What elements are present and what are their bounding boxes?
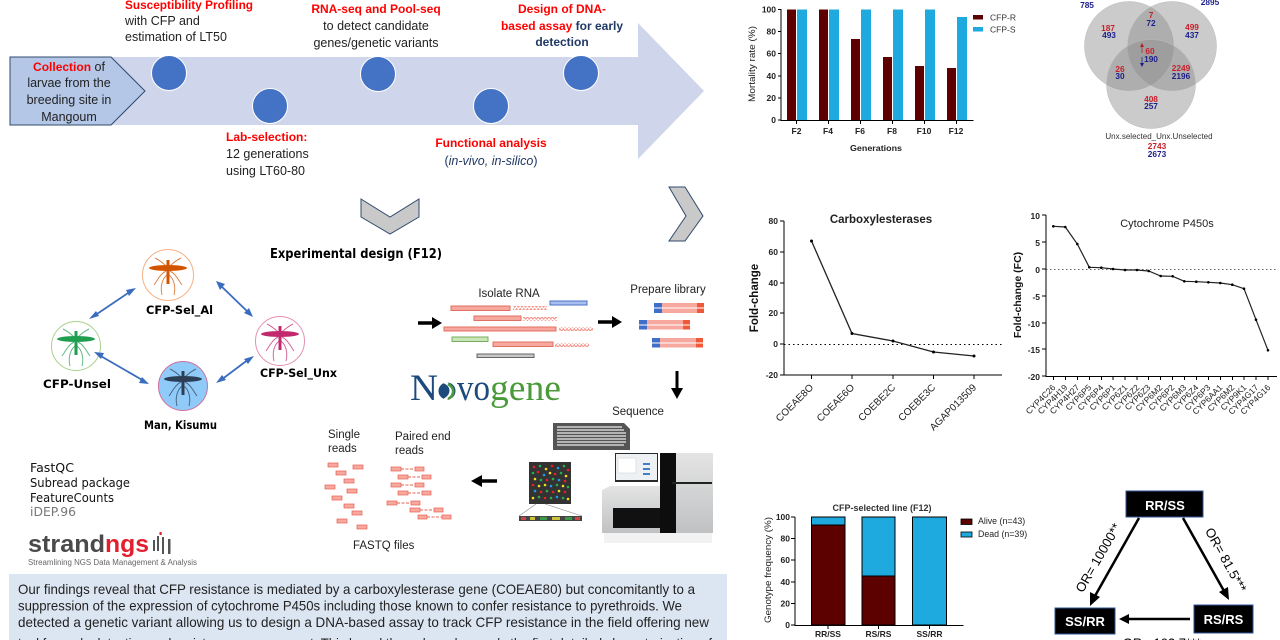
step: DNA-based assay: Design of DNA- [518,2,606,16]
chart: venn diagram: 72 [1146,18,1156,28]
chart: mortality rate bars: 0 [771,115,776,125]
logo: strandngs: ngs [105,531,149,558]
chart: cytochrome P450s line: CYP6Z1 [1100,382,1130,412]
chart: genotype frequency stacked bars: 60 [781,555,790,565]
step: susceptibility profiling [124,0,253,44]
chart: mortality rate bars: 100 [762,4,776,14]
experimental design network: CFP-Sel_Unx [260,366,338,381]
chart: venn diagram: 2249 [1172,63,1191,73]
arrows [1090,518,1229,624]
step: RNA-seq and Pool-seq: RNA-seq and Pool-seq [311,2,441,16]
icon: CFP-Unsel mosquito [52,322,100,370]
chart: cytochrome P450s line: CYP6P4 [1075,382,1106,412]
chart: cytochrome P450s line: 0 [1035,265,1040,275]
chart: venn diagram: 2196 [1172,71,1191,81]
chart: genotype frequency stacked bars: 80 [781,534,790,544]
chart: venn diagram: 493 [1102,30,1116,40]
chart: genotype frequency stacked bars: RS/RS [866,629,892,639]
chart: mortality rate bars: F2 [792,126,802,136]
chart: cytochrome P450s line: -5 [1032,292,1040,302]
chart: venn diagram: 190 [1144,54,1158,64]
genotype odds ratio triangle: OR= 10000** [1072,521,1124,595]
chart: venn diagram: 785 [1080,0,1094,10]
step: susceptibility profiling: with CFP and [124,14,200,28]
base-calling image [519,462,582,521]
software list: FastQC [30,460,74,475]
library constructs [639,303,704,348]
chart: cytochrome P450s line: CYP6M3 [1157,382,1189,413]
software list: iDEP.96 [30,504,76,519]
paired end reads: reads [395,445,424,457]
chart: genotype frequency stacked bars: 20 [781,598,790,608]
heading: experimental design: Experimental design (F12) [270,247,442,262]
chart: mortality rate bars [747,4,1016,153]
paired end reads: Paired end [395,431,451,443]
chart: mortality rate bars: 80 [767,26,776,36]
panel: conclusion text [9,574,727,640]
chart: mortality rate bars: F4 [823,126,833,136]
chart: cytochrome P450s line: Fold-change (FC) [1012,252,1024,338]
chart: mortality rate bars: 40 [767,71,776,81]
chart: mortality rate bars: F8 [887,126,897,136]
start box: collection: Mangoum [41,110,97,124]
step: lab-selection: Lab-selection: [226,130,307,144]
chart: cytochrome P450s line: CYP4G16 [1238,382,1273,416]
logo: Novogene [410,368,561,409]
chart: venn diagram: 7 [1149,10,1154,20]
genotype odds ratio triangle: RS/RS [1204,612,1244,627]
start box: collection [10,57,145,125]
paired end reads [387,431,451,519]
start box: collection: Collection of [33,60,105,74]
chart: venn diagram: 499 [1185,22,1199,32]
chart: genotype frequency stacked bars: 100 [776,512,790,522]
chart: cytochrome P450s line: CYP6AA1 [1190,382,1225,416]
panel: conclusion text: detected a genetic variant allowing us to design a DNA-based assay to track CFP resistance in the field offering new [18,614,710,630]
chart: venn diagram: 30 [1115,71,1125,81]
chart: cytochrome P450s line: CYP6P2 [1146,382,1177,412]
step: functional analysis: Functional analysis [435,136,547,150]
genotype odds ratio triangle: OR= 81.5*** [1202,525,1250,595]
chart: genotype frequency stacked bars: CFP-selected line (F12) [832,503,932,513]
chart: genotype frequency stacked bars: Genotype frequency (%) [763,517,774,623]
chart: genotype frequency stacked bars: 40 [781,577,790,587]
chart: venn diagram: 26 [1115,64,1125,74]
sequencer instrument [602,453,713,543]
step: functional analysis: (in-vivo, in-silico) [444,154,538,168]
chart: genotype frequency stacked bars [763,503,1027,639]
experimental design network [43,250,338,432]
label: prepare library: Prepare library [630,284,706,296]
chart: genotype frequency stacked bars: 0 [785,620,790,630]
chart: cytochrome P450s line: CYP4H19 [1036,382,1070,416]
flow cell [553,423,630,450]
chart: carboxylesterases line: COEAE8O [774,382,816,424]
step: DNA-based assay [501,2,623,49]
RNA-seq workflow [325,284,713,552]
arrows between steps [418,316,683,487]
chart: mortality rate bars: CFP-S [990,24,1016,34]
software list: Subread package [30,475,130,490]
chart: mortality rate bars: F10 [917,126,932,136]
chart: cytochrome P450s line [1012,211,1277,416]
chart: carboxylesterases line: COEBE2C [857,382,898,424]
chart: carboxylesterases line: 20 [769,308,778,318]
chart: cytochrome P450s line: -20 [1028,372,1040,382]
chart: venn diagram: Unx.selected_Unx.Unselected [1105,132,1213,141]
chart: cytochrome P450s line: CYP6M2 [1133,382,1165,413]
chart: genotype frequency stacked bars: Dead (n=39) [978,529,1027,539]
panel: conclusion text: suppression of the expression of cytochrome P450s including those known to confer resistance to pyrethroids. We [18,598,682,614]
chart: cytochrome P450s line: CYP4H27 [1048,382,1082,416]
experimental design network: CFP-Unsel [43,377,111,391]
RNA fragments [444,301,593,358]
chart: carboxylesterases line: COEBE3C [897,382,938,424]
logo: Novogene: N [410,368,438,409]
chart: carboxylesterases line: COEAE6O [815,382,857,424]
chart: cytochrome P450s line: 10 [1031,211,1040,221]
icon: CFP-Sel_Unx mosquito [256,316,304,366]
chart: venn diagram: 187 [1101,23,1115,33]
step: RNA-seq and Pool-seq: to detect candidate [323,19,429,33]
logo: strandngs: Streamlining NGS Data Management & Analysis [28,558,197,567]
step: functional analysis [435,136,547,168]
single reads [325,429,367,529]
genotype odds ratio triangle [1055,491,1253,640]
chart: venn diagram: 257 [1144,101,1158,111]
step: lab-selection: 12 generations [226,147,309,161]
chart: venn diagram: 437 [1185,30,1199,40]
step: RNA-seq and Pool-seq [311,2,441,50]
step: RNA-seq and Pool-seq: genes/genetic variants [313,36,439,50]
chart: carboxylesterases line: Fold-change [749,264,761,332]
chart: genotype frequency stacked bars: SS/RR [917,629,942,639]
software list [30,460,130,519]
chart: genotype frequency stacked bars: Alive (n=43) [978,516,1025,526]
start box: collection: breeding site in [27,93,111,107]
chart: mortality rate bars: Generations [850,143,902,153]
step: lab-selection [226,130,309,178]
panel: conclusion text: Our findings reveal that CFP resistance is mediated by a carboxylesterase gene (COEAE80) but concomitantly to a [18,581,695,597]
chart: venn diagram: 60 [1145,46,1155,56]
experimental design network: CFP-Sel_Al [146,303,213,318]
logo: strandngs: strand [28,531,105,558]
experimental design network: Man, Kisumu [144,418,217,432]
chart: venn diagram: 2743 [1148,141,1167,151]
chart: mortality rate bars: Mortality rate (%) [747,26,757,102]
chart: carboxylesterases line: -20 [766,370,778,380]
chart: venn diagram [1080,0,1220,159]
step: susceptibility profiling: estimation of LT50 [125,30,227,44]
software list: FeatureCounts [30,490,114,505]
chart: carboxylesterases line [749,214,1002,433]
chart: mortality rate bars: CFP-R [990,12,1016,22]
chart: cytochrome P450s line: -15 [1028,345,1040,355]
icon: Man Kisumu mosquito [158,362,208,410]
chart: carboxylesterases line: Carboxylesterases [830,214,932,226]
chart: cytochrome P450s line: CYP6P3 [1182,382,1213,412]
chart: venn diagram: 2673 [1148,149,1167,159]
chevron down [361,199,419,234]
chart: carboxylesterases line: 80 [769,216,778,226]
start box: collection: larvae from the [27,76,111,90]
chart: cytochrome P450s line: CYP6Z2 [1112,382,1142,412]
label: FASTQ files: FASTQ files [353,540,415,552]
step: DNA-based assay: based assay for early [501,19,623,33]
chart: carboxylesterases line: 60 [769,247,778,257]
chart: mortality rate bars: F6 [855,126,865,136]
chart: mortality rate bars: 20 [767,93,776,103]
single reads: Single [328,429,360,441]
chart: mortality rate bars: F12 [949,126,964,136]
logo: Novogene: gene [490,368,561,409]
chart: carboxylesterases line: AGAP013509 [928,382,979,433]
genotype odds ratio triangle: RR/SS [1145,498,1185,513]
chart: cytochrome P450s line: -10 [1028,319,1040,329]
single reads: reads [328,443,357,455]
chart: carboxylesterases line: 0 [773,339,778,349]
chevron right [669,187,703,241]
chart: cytochrome P450s line: 5 [1035,238,1040,248]
label: isolate RNA: Isolate RNA [478,288,540,300]
icon: CFP-Sel_Al mosquito [142,250,194,300]
chart: cytochrome P450s line: CYP6Z4 [1171,382,1201,412]
label: sequence: Sequence [612,406,664,418]
chart: genotype frequency stacked bars: RR/SS [815,629,841,639]
logo: Novogene: vo [457,368,490,409]
chart: cytochrome P450s line: CYP6Z3 [1123,382,1153,412]
chart: cytochrome P450s line: CYP6M2 [1205,382,1237,413]
chart: cytochrome P450s line: CYP4C26 [1024,382,1058,416]
timeline arrow [80,23,704,159]
step: lab-selection: using LT60-80 [226,164,305,178]
genotype odds ratio triangle: SS/RR [1065,614,1105,629]
timeline milestones [152,56,598,124]
chart: cytochrome P450s line: Cytochrome P450s [1120,218,1214,230]
chart: cytochrome P450s line: CYP4G17 [1226,382,1261,416]
chart: carboxylesterases line: 40 [769,278,778,288]
double arrows [89,281,254,384]
step: DNA-based assay: detection [535,35,589,49]
chart: venn diagram: 408 [1144,94,1158,104]
chart: cytochrome P450s line: CYP6P1 [1087,382,1118,412]
chart: cytochrome P450s line: CYP9K1 [1218,382,1249,412]
chart: cytochrome P450s line: CYP6P5 [1063,382,1094,412]
logo: strandngs [28,531,197,567]
chart: mortality rate bars: 60 [767,48,776,58]
